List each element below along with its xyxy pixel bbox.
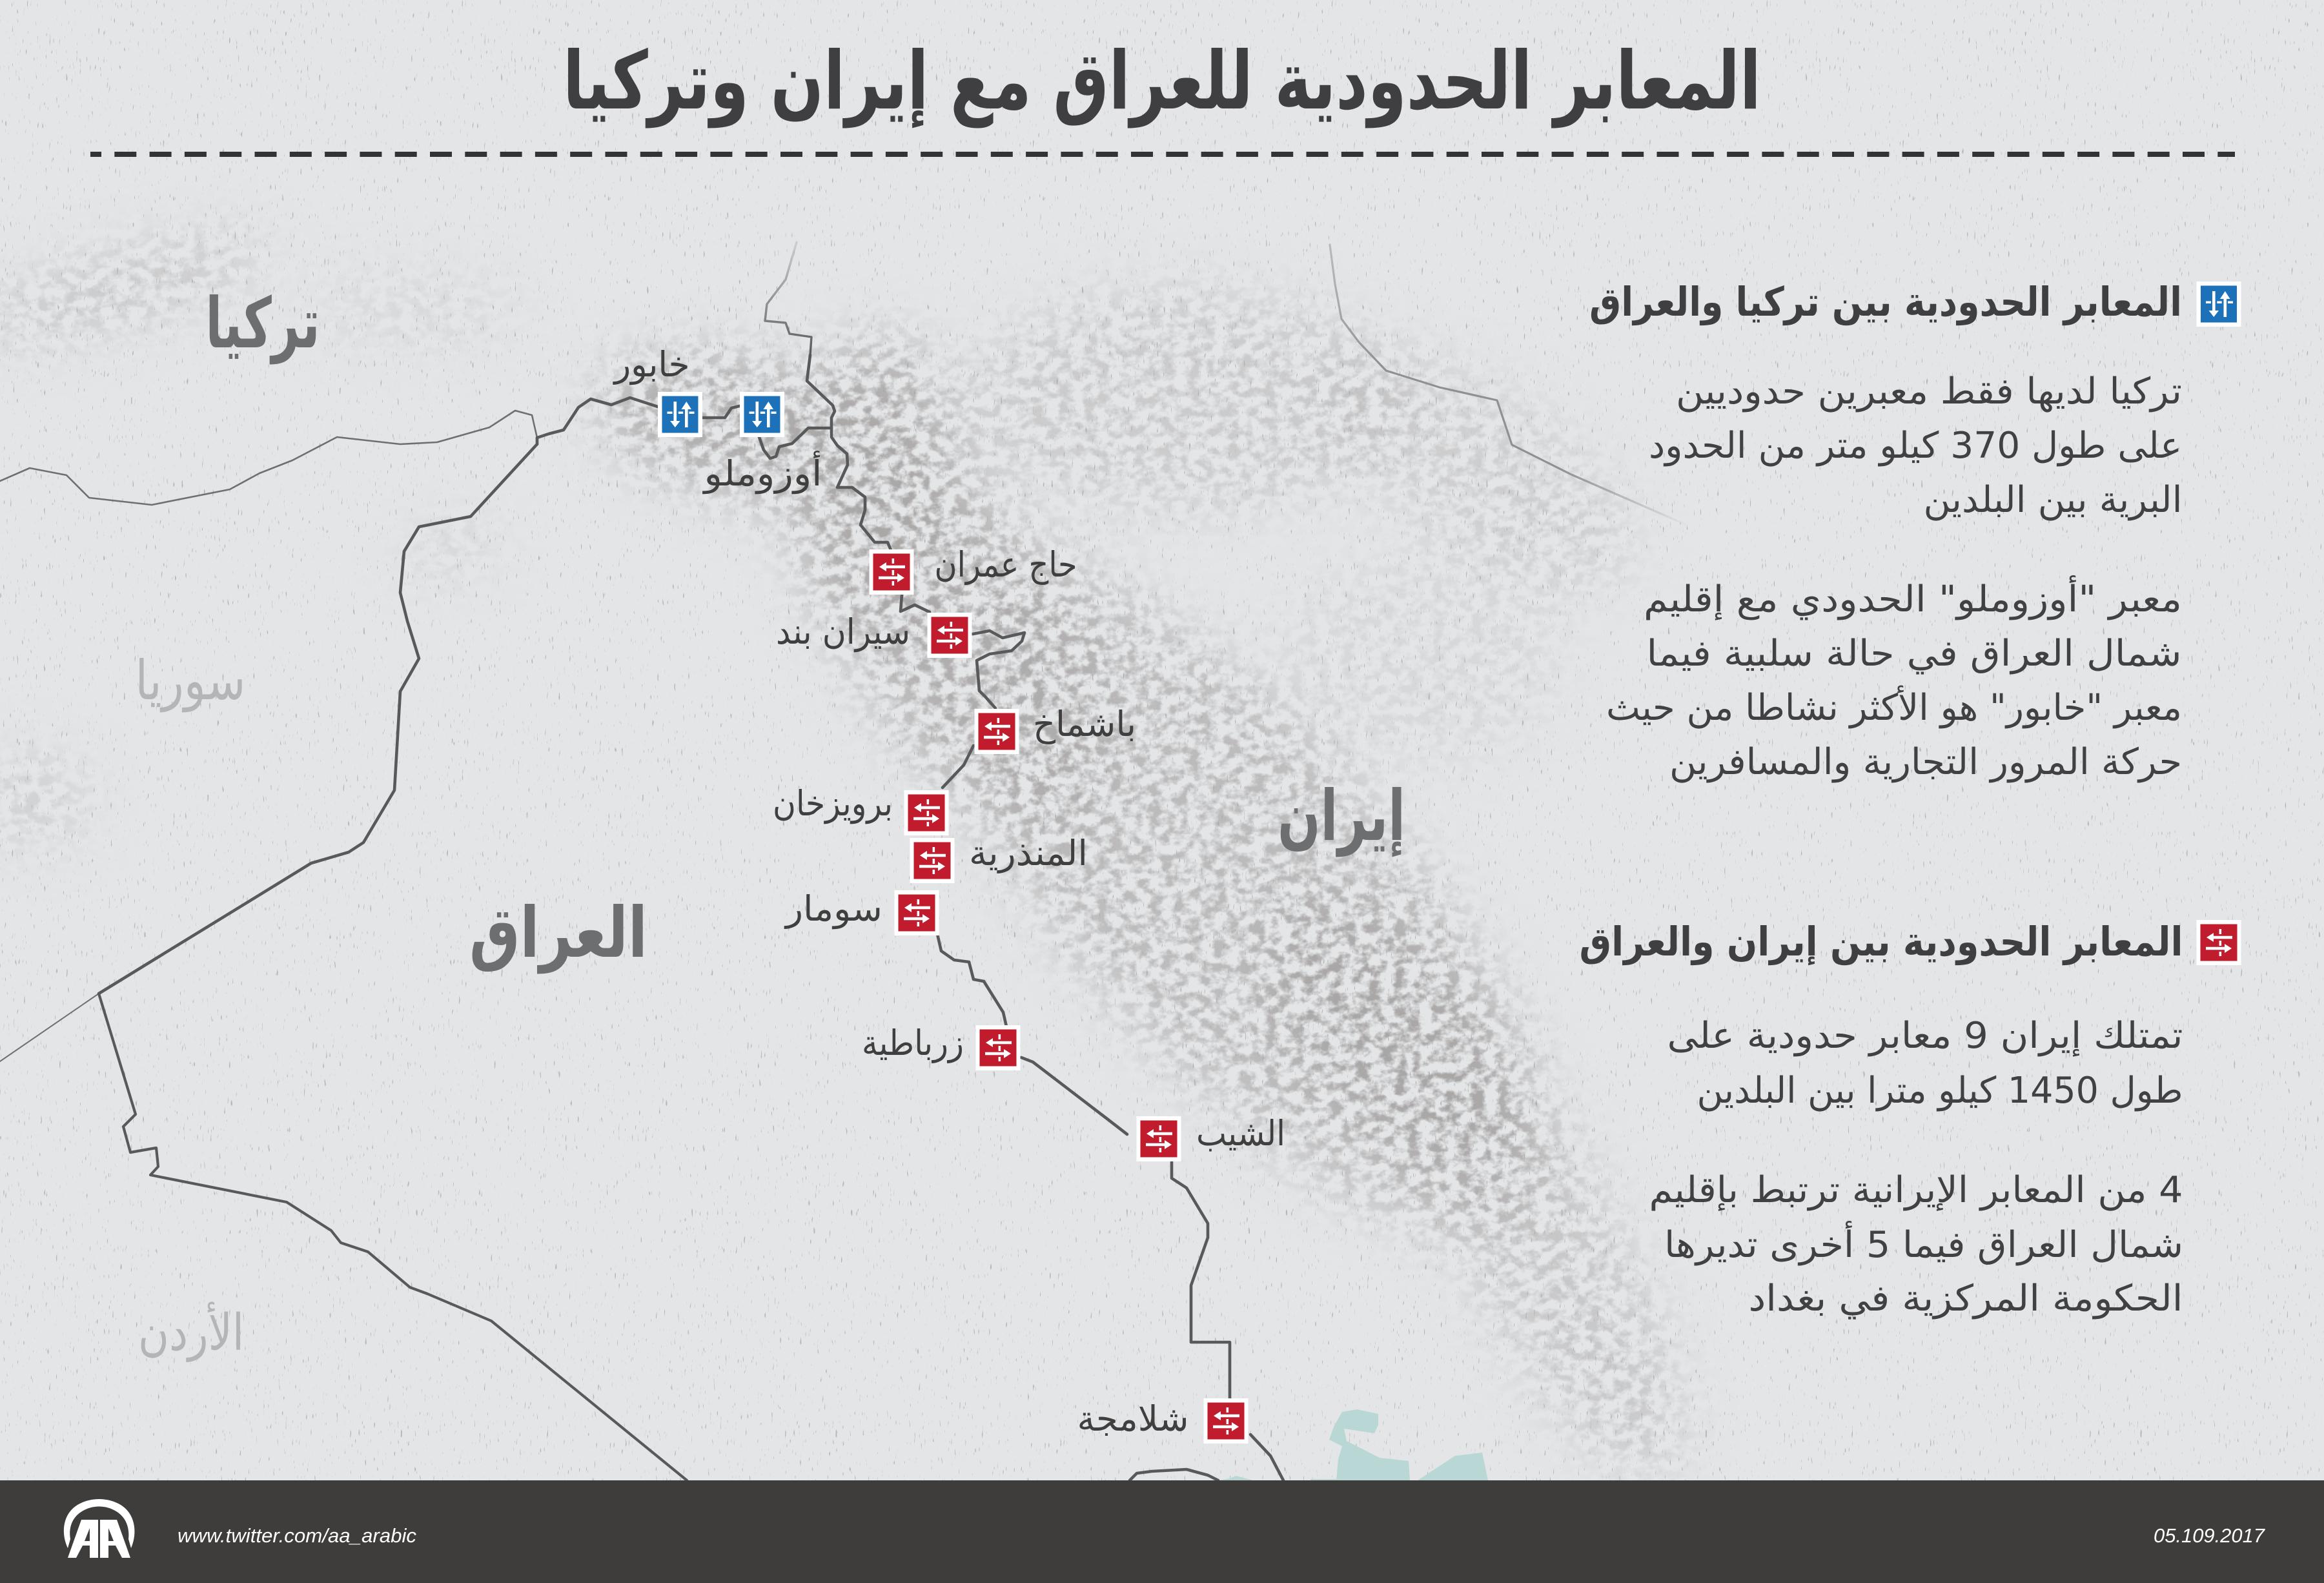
text block: Turkey paragraph two — [1606, 575, 2182, 783]
crossing: Shalamcha — [1077, 1398, 1249, 1444]
text block: Turkey paragraph one: البرية بين البلدين — [1924, 479, 2182, 521]
border: Sumar to Zarbatiya — [937, 934, 1006, 1026]
crossing: Khabur: خابور — [613, 344, 689, 385]
crossing: Bashmakh — [975, 704, 1136, 754]
text block: Turkey paragraph two: معبر "أوزوملو" الحدودي مع إقليم — [1644, 575, 2182, 621]
border: south of Shalamcha — [1250, 1435, 1283, 1480]
border: Kuwait — [1130, 1469, 1218, 1480]
crossing: Haj Omran: حاج عمران — [935, 544, 1077, 585]
icon: AA logo — [64, 1499, 134, 1558]
text block: Iran paragraph two: 4 من المعابر الإيرانية ترتبط بإقليم — [1649, 1169, 2183, 1212]
crossing: Sumar: سومار — [784, 888, 882, 929]
crossing: Parwizkhan: برويزخان — [773, 783, 893, 824]
text block: Iran paragraph two: الحكومة المركزية في بغداد — [1748, 1278, 2183, 1320]
border: Iraq-Jordan-Saudi — [99, 994, 687, 1480]
crossing: Sumar — [784, 888, 939, 935]
crossing: Zarbatiya: زرباطية — [862, 1023, 964, 1063]
country label: Iran: إيران — [1278, 776, 1405, 857]
country label: Iraq: العراق — [469, 893, 647, 974]
border: Iran north-west, fading — [765, 242, 811, 355]
international borders — [0, 242, 1689, 1480]
footer link: www.twitter.com/aa_arabic — [178, 1524, 416, 1547]
crossing: Shib — [1136, 1113, 1285, 1161]
text block: Iran paragraph two: شمال العراق فيما 5 أخرى تديرها — [1664, 1221, 2183, 1266]
panel: Turkey-Iraq crossings — [1589, 278, 2241, 783]
text block: Iran paragraph one: تمتلك إيران 9 معابر حدودية على — [1667, 1015, 2183, 1057]
border: Khabur to Ozumlu — [702, 406, 739, 418]
footer date: 05.109.2017 — [2154, 1524, 2266, 1547]
crossing: Shalamcha: شلامجة — [1077, 1398, 1189, 1439]
country label: Turkey: تركيا — [205, 283, 320, 365]
Persian Gulf water — [1218, 1409, 1488, 1480]
text block: Turkey paragraph one — [1649, 371, 2182, 521]
border: Ozumlu to tripoint — [759, 428, 831, 458]
terrain relief: Zagros and Taurus mountains — [0, 218, 1731, 1510]
heading: Iran-Iraq: المعابر الحدودية بين إيران والعراق — [1579, 918, 2183, 965]
crossing: Parwizkhan — [773, 783, 949, 835]
country labels — [136, 283, 1405, 1362]
crossing: Ozumlu: أوزوملو — [702, 451, 822, 494]
title: المعابر الحدودية للعراق مع إيران وتركيا — [563, 35, 1761, 128]
icon: Turkey crossings — [2196, 281, 2241, 327]
border: Iran-Turkey down to Haj Omran — [807, 355, 891, 550]
country label: Jordan: الأردن — [138, 1302, 244, 1362]
crossing: Shib: الشيب — [1196, 1113, 1285, 1154]
crossing: Mandhariya: المنذرية — [969, 833, 1088, 873]
crossing: Zarbatiya — [862, 1023, 1020, 1070]
border: Siran Band to Bashmakh — [973, 631, 1024, 708]
border: Iraq-Syria — [99, 444, 537, 994]
country label: Syria: سوريا — [136, 649, 245, 713]
border: Bashmakh to Parwizkhan — [943, 746, 973, 788]
border: Iraq-Turkey west of Khabur — [537, 398, 660, 444]
icon: Iran crossings — [2196, 920, 2241, 965]
panel: Iran-Iraq crossings — [1579, 918, 2241, 1320]
text block: Iran paragraph one — [1667, 1015, 2183, 1112]
border: Shib to Shalamcha — [1172, 1162, 1230, 1402]
crossing: Mandhariya — [910, 833, 1088, 883]
crossing: Siran Band: سيران بند — [776, 611, 910, 652]
border: Turkey-Syria — [0, 411, 537, 505]
dashed divider — [90, 152, 2235, 157]
crossing: Khabur — [613, 344, 702, 437]
text block: Turkey paragraph two: شمال العراق في حالة سلبية فيما — [1646, 633, 2182, 675]
crossing: Bashmakh: باشماخ — [1033, 704, 1136, 744]
footer — [0, 1480, 2324, 1583]
text block: Iran paragraph one: طول 1450 كيلو مترا بين البلدين — [1697, 1070, 2183, 1112]
text block: Turkey paragraph two: حركة المرور التجارية والمسافرين — [1669, 741, 2182, 783]
text block: Turkey paragraph one: على طول 370 كيلو متر من الحدود — [1649, 425, 2182, 467]
crossing: Haj Omran — [869, 544, 1077, 595]
text block: Turkey paragraph one: تركيا لديها فقط معبرين حدوديين — [1676, 371, 2182, 413]
border: Syria-Jordan — [0, 994, 99, 1061]
border: Zarbatiya to Shib — [1021, 1057, 1127, 1134]
border: Iran north-east, fading — [1330, 245, 1689, 526]
crossing: Siran Band — [776, 611, 972, 658]
text block: Iran paragraph two — [1649, 1169, 2183, 1320]
crossing: Ozumlu — [702, 392, 822, 494]
heading: Turkey-Iraq: المعابر الحدودية بين تركيا والعراق — [1589, 278, 2182, 325]
text block: Turkey paragraph two: معبر "خابور" هو الأكثر نشاطا من حيث — [1606, 685, 2182, 729]
border: Haj Omran to Siran Band — [901, 595, 930, 612]
